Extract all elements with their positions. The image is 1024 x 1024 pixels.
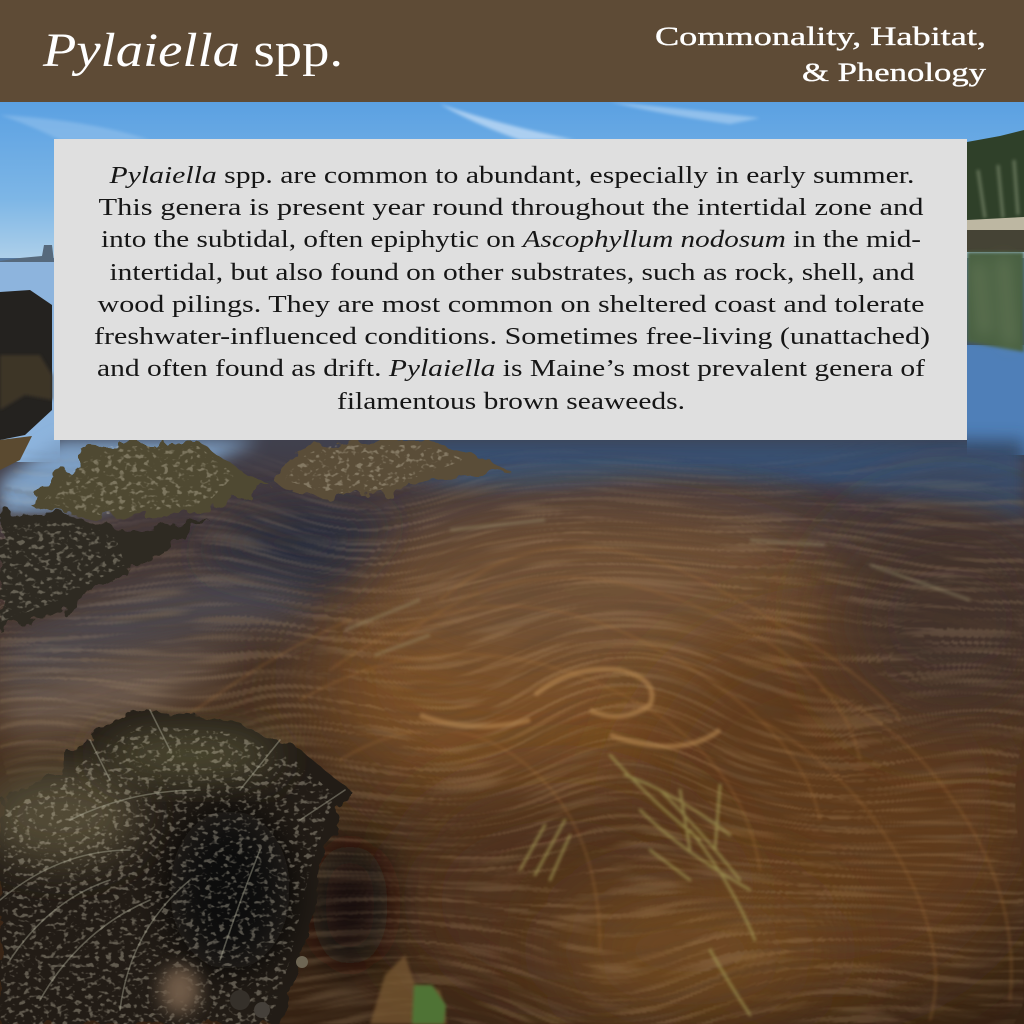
rock with seaweed: upper left small — [0, 290, 52, 470]
header bar — [0, 0, 1024, 102]
seaweed filaments — [60, 547, 1011, 1020]
swirl of algae at centre — [420, 669, 720, 746]
body paragraph: intertidal, but also found on other substrates, such as rock, shell, and — [110, 259, 914, 286]
rocks and mussels at bottom — [160, 956, 308, 1018]
upper water reflection — [0, 262, 1024, 520]
seaweed mound: top centre — [275, 441, 510, 498]
flowing algae filaments, dark — [0, 487, 1021, 988]
seaweed mound: top left — [30, 442, 270, 520]
seaweed mound: left — [0, 512, 210, 632]
body paragraph: and often found as drift. Pylaiella is Maine’s most prevalent genera of — [97, 355, 926, 382]
seaweed mound: bottom left foreground — [0, 710, 350, 1024]
body paragraph: into the subtidal, often epiphytic on Ascophyllum nodosum in the mid- — [101, 226, 921, 253]
body paragraph: wood pilings. They are most common on sheltered coast and tolerate — [98, 291, 925, 318]
text panel — [54, 139, 967, 440]
brown algae glow — [0, 505, 1024, 1020]
sky — [0, 100, 1024, 265]
far shore with trees and its reflection — [967, 130, 1024, 352]
body paragraph: filamentous brown seaweeds. — [337, 388, 685, 415]
body paragraph: Pylaiella spp. are common to abundant, especially in early summer. — [108, 162, 915, 189]
green seaweed tuft: centre — [520, 755, 755, 1015]
body paragraph: This genera is present year round throughout the intertidal zone and — [98, 194, 924, 221]
body paragraph — [94, 162, 930, 415]
title: Pylaiella spp. — [42, 24, 343, 77]
subtitle line 2: & Phenology — [802, 58, 986, 87]
subtitle line 1: Commonality, Habitat, — [655, 22, 986, 51]
water surface — [0, 258, 1024, 1024]
small floating seaweed patches — [345, 520, 970, 655]
body paragraph: freshwater-influenced conditions. Sometimes free-living (unattached) — [94, 323, 930, 350]
distant island — [0, 245, 54, 262]
green seaweed tuft: bottom — [370, 955, 447, 1024]
flowing algae filaments, light — [0, 440, 1024, 1024]
